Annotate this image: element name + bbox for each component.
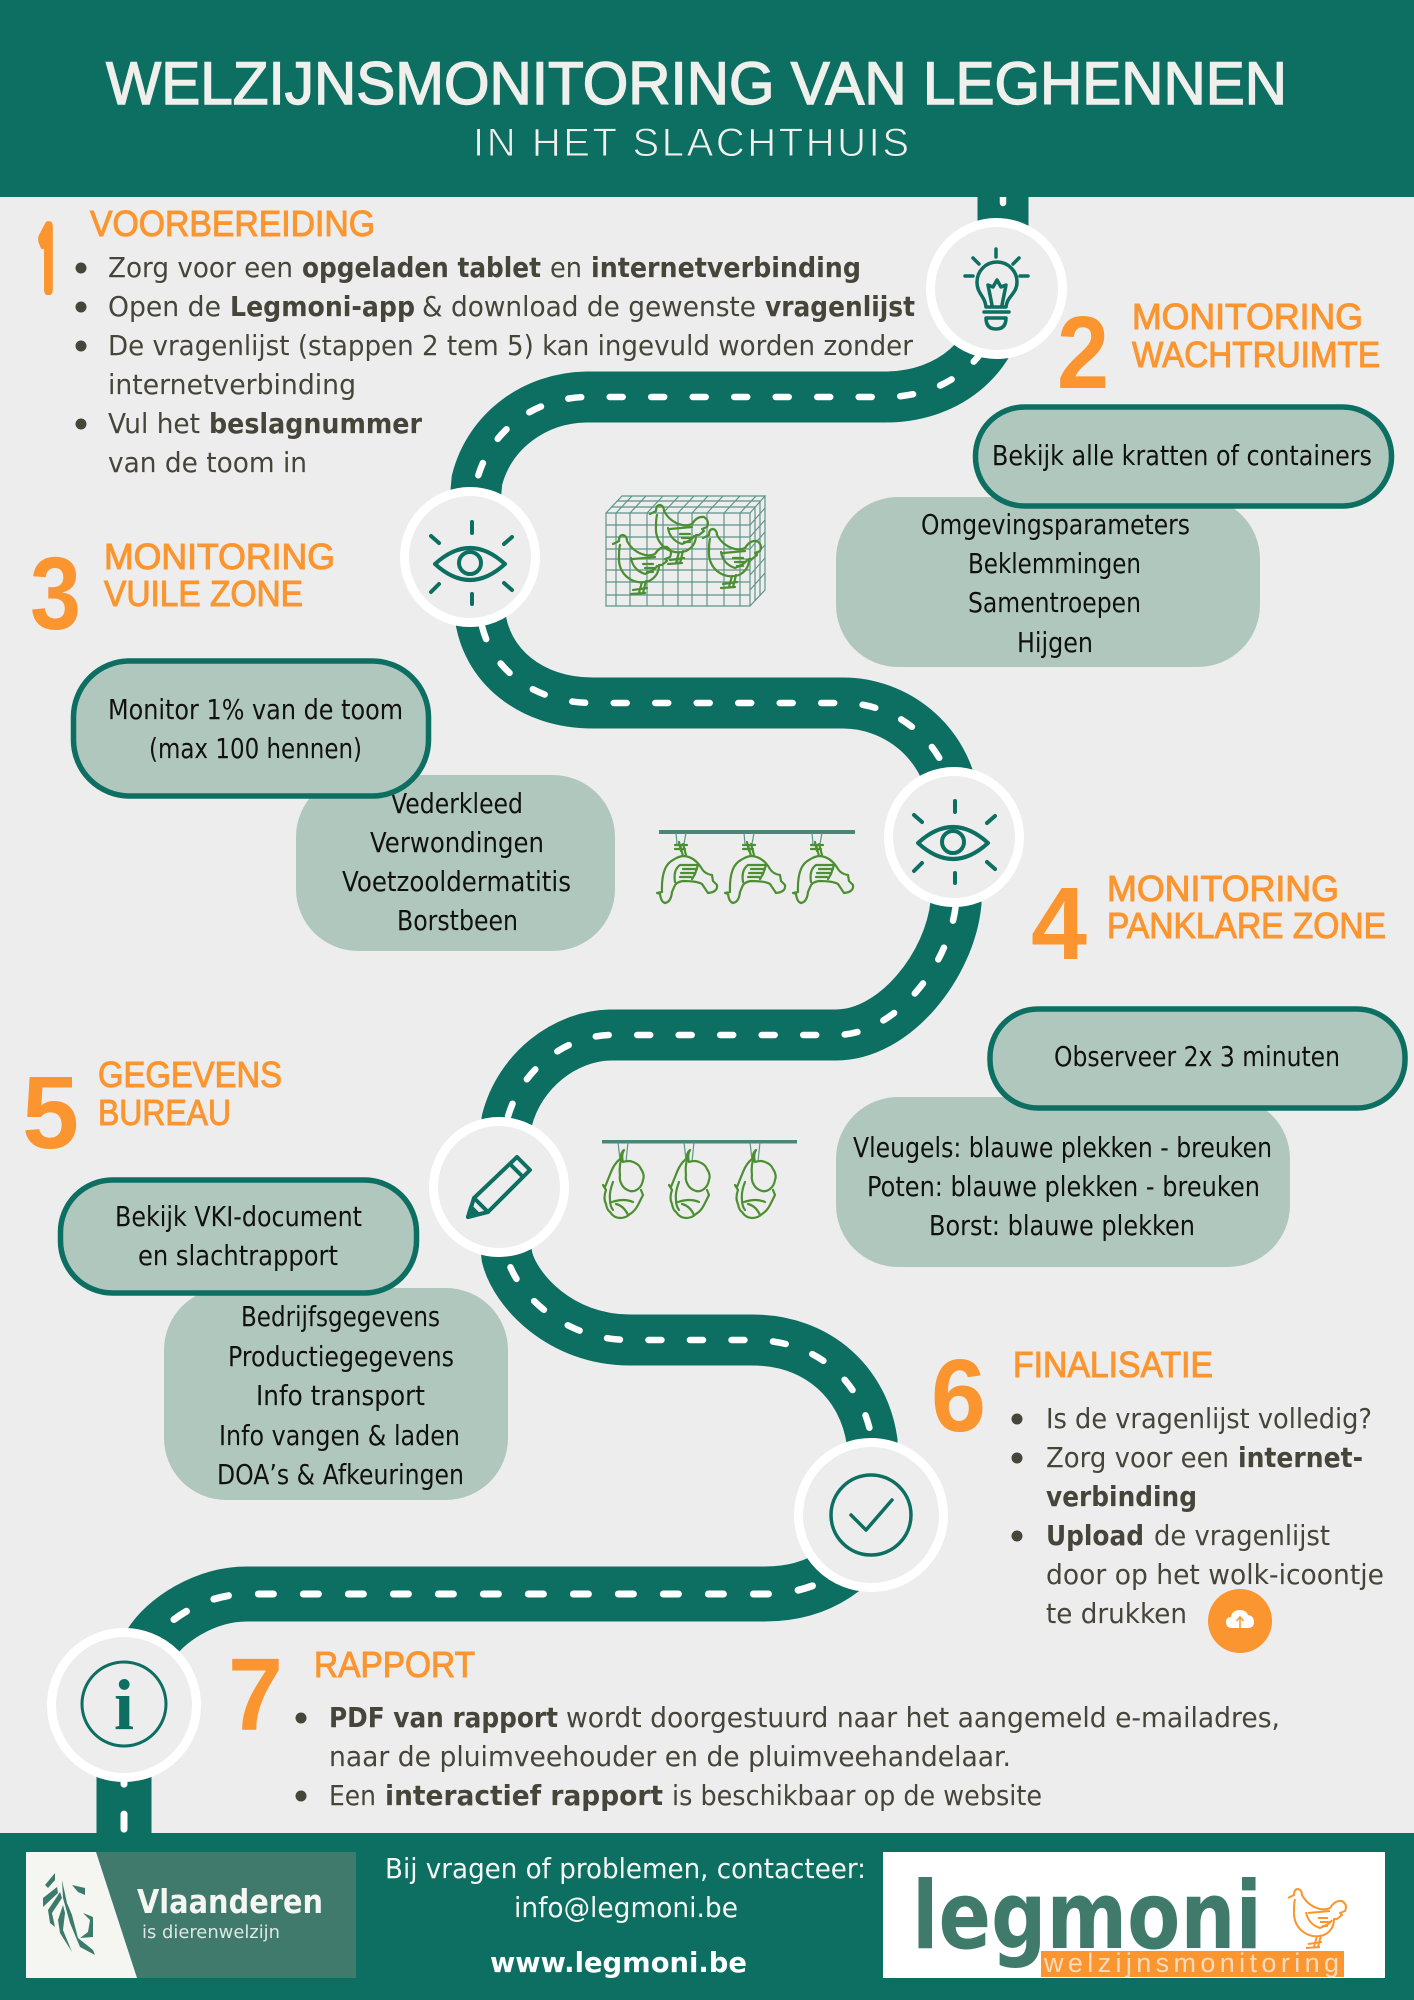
icon: info: i [114,1665,134,1745]
icon: eye (panklare zone) [888,772,1020,902]
bullet list: Is de vragenlijst volledig? [1046,1402,1372,1435]
bullet list: PDF van rapport [329,1701,558,1734]
heading: RAPPORT [314,1644,475,1685]
contact text: www.legmoni.be [490,1946,747,1979]
icon: cloud upload [1208,1589,1272,1653]
list box: Omgevingsparameters [921,509,1190,541]
icon: lion [43,1873,95,1955]
bullet list: is beschikbaar op de website [672,1779,1042,1812]
callout: VKI-document: en slachtrapport [138,1240,338,1272]
number 5: 5 [22,1055,79,1170]
icon: carcasses on rail [602,1140,797,1218]
icon: check mark [798,1442,944,1588]
bullet list: Zorg voor een [108,251,293,284]
bullet list: De vragenlijst (stappen 2 tem 5) kan ingevuld worden zonder [108,329,913,362]
list box: Info transport [256,1380,425,1412]
footer band [0,1833,1414,2000]
bullet list: internetverbinding [591,251,861,284]
heading [1132,296,1380,375]
list box: Poten: blauwe plekken - breuken [867,1171,1260,1203]
callout: monitor 1%: (max 100 hennen) [149,733,362,765]
title: WELZIJNSMONITORING VAN LEGHENNEN [106,50,1287,117]
list box [164,1288,508,1500]
heading [98,1054,282,1133]
bullet list: naar de pluimveehouder en de pluimveehandelaar. [329,1740,1011,1773]
bullet list: van de toom in [108,446,307,479]
bullet list: Vul het [108,407,200,440]
bullet list: & download de gewenste [422,290,756,323]
bullet list: interactief rapport [385,1779,663,1812]
list box: Vederkleed [391,788,523,820]
panel: step 4 monitoring panklare zone [836,866,1405,1267]
contact text: Bij vragen of problemen, contacteer: [385,1852,866,1885]
icon: hens in crate [606,496,765,606]
heading: MONITORING [1132,296,1363,337]
list box: Productiegegevens [228,1341,454,1373]
panel: step 5 gegevens bureau [22,1054,508,1500]
panel: step 2 monitoring wachtruimte [836,295,1392,667]
bullet list: door op het wolk-icoontje [1046,1558,1384,1591]
bullet list: Een [329,1779,376,1812]
icon: pencil [434,1122,564,1252]
bullet list: te drukken [1046,1597,1187,1630]
bullet list: beslagnummer [209,407,422,440]
bullet list [1012,1402,1384,1630]
panel: step 7 rapport [228,1637,1280,1812]
bullet list: wordt doorgestuurd naar het aangemeld e-mailadres, [566,1701,1280,1734]
list box: DOA’s & Afkeuringen [217,1459,464,1491]
heading: MONITORING [104,536,335,577]
logo: legmoni: welzijnsmonitoring [1043,1948,1339,1978]
bullet list: de vragenlijst [1154,1519,1330,1552]
callout: VKI-document: Bekijk VKI-document [115,1201,362,1233]
bullet list: internet- [1238,1441,1363,1474]
bullet list [296,1701,1280,1812]
panel: step 1 voorbereiding [35,203,915,479]
heading: PANKLARE ZONE [1107,905,1386,946]
icon: eye (vuile zone) [404,492,536,622]
callout: monitor 1% [74,661,428,796]
panel: step 1 voorbereiding: 1 [35,219,60,303]
panel: step 3 monitoring vuile zone [30,536,615,951]
list box: Samentroepen [968,587,1141,619]
list box: Borstbeen [397,905,518,937]
list box: Bedrijfsgegevens [241,1301,440,1333]
list box: Voetzooldermatitis [342,866,571,898]
bullet list: Legmoni-app [230,290,415,323]
bullet list: en [550,251,582,284]
bullet list: internetverbinding [108,368,356,401]
bullet list: Open de [108,290,221,323]
icon: info [52,1632,196,1778]
list box: Verwondingen [370,827,544,859]
bullet list [76,251,915,479]
icon: hanging hens [657,830,855,903]
heading: GEGEVENS [98,1054,282,1095]
icon: light bulb [930,222,1062,354]
heading: FINALISATIE [1013,1344,1213,1385]
heading: VUILE ZONE [104,573,303,614]
number 3: 3 [30,536,81,651]
callout: observeer: Observeer 2x 3 minuten [1054,1041,1340,1073]
heading [104,536,335,614]
list box: Vleugels: blauwe plekken - breuken [853,1132,1272,1164]
callout: monitor 1%: Monitor 1% van de toom [108,694,403,726]
bullet list: verbinding [1046,1480,1197,1513]
list box: Borst: blauwe plekken [929,1210,1195,1242]
number 7: 7 [228,1637,283,1752]
list box [836,1097,1290,1267]
header band [0,0,1414,197]
list box [296,775,615,951]
heading: BUREAU [98,1092,231,1133]
heading: MONITORING [1107,868,1339,909]
logo: Vlaanderen: Vlaanderen [137,1882,323,1921]
list box: Beklemmingen [968,548,1141,580]
subtitle: IN HET SLACHTHUIS [473,121,909,165]
callout: bekijk kratten [976,407,1392,506]
list box [836,497,1260,667]
contact text [385,1852,866,1979]
logo: Vlaanderen [26,1852,356,1978]
number 2: 2 [1057,295,1109,410]
list box: Info vangen & laden [219,1420,460,1452]
heading: WACHTRUIMTE [1132,334,1380,375]
bullet list: opgeladen tablet [302,251,541,284]
bullet list: Upload [1046,1519,1144,1552]
contact text: info@legmoni.be [514,1891,738,1924]
panel: step 6 finalisatie [931,1338,1384,1653]
number 6: 6 [931,1338,986,1453]
heading [1107,868,1386,946]
bullet list: Zorg voor een [1046,1441,1229,1474]
logo: Vlaanderen: is dierenwelzijn [142,1922,280,1943]
icon: orange hen [1288,1889,1346,1948]
winding road [124,190,1003,1840]
heading: VOORBEREIDING [90,203,375,244]
list box: Hijgen [1017,627,1093,659]
callout: VKI-document [60,1180,416,1293]
logo: legmoni: legmoni [912,1862,1262,1971]
bullet list: vragenlijst [765,290,915,323]
number 4: 4 [1031,866,1087,981]
callout: observeer [990,1009,1405,1108]
